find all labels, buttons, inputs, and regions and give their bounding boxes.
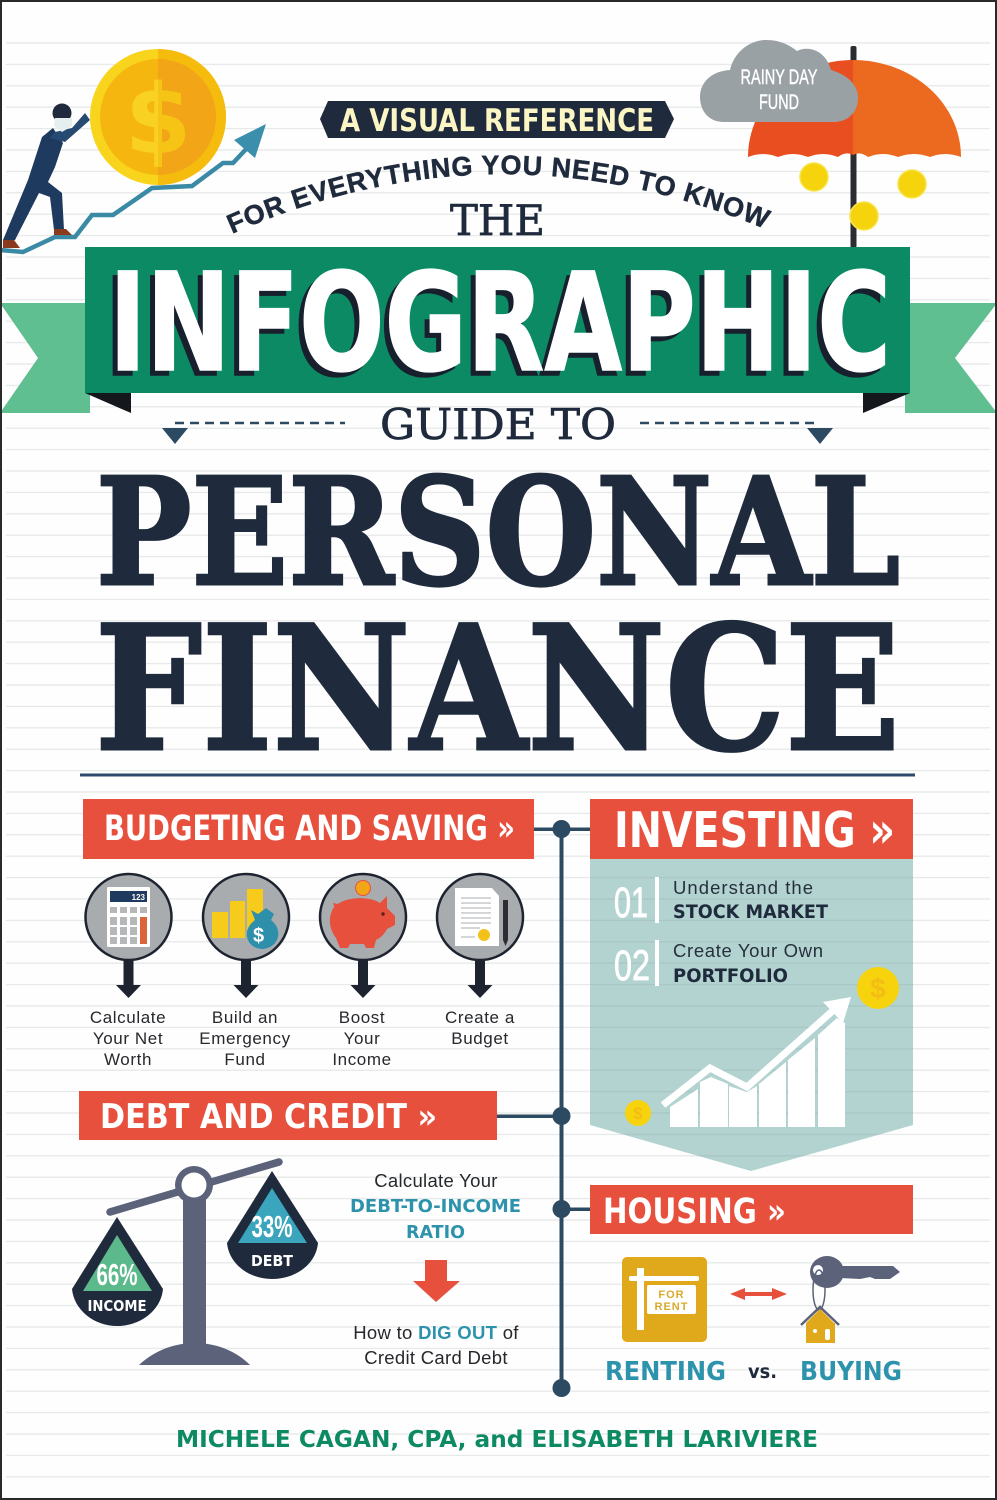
- icon: falling coins: [800, 163, 926, 230]
- icon: coin pushed uphill: [90, 49, 226, 185]
- icon: key with house fob: [801, 1256, 900, 1343]
- label: Create a: [445, 1008, 515, 1027]
- label: Calculate: [90, 1008, 166, 1027]
- label: [199, 1008, 291, 1069]
- heading: finance: FINANCE: [95, 587, 900, 790]
- icon: coin pushed uphill: $: [125, 64, 191, 176]
- label: Build an: [212, 1008, 278, 1027]
- badge: a visual reference: A VISUAL REFERENCE: [340, 103, 654, 139]
- weight: 33% debt: 33%: [252, 1209, 292, 1244]
- budgeting item: build an emergency fund: [199, 874, 291, 1069]
- icon: balance scale: [72, 1162, 318, 1365]
- icon: for rent sign: RENT: [655, 1301, 688, 1313]
- label: [332, 1008, 392, 1069]
- weight: 33% debt: DEBT: [251, 1252, 294, 1270]
- heading: guide to: GUIDE TO: [380, 400, 616, 449]
- investing step 01: [614, 877, 828, 927]
- debt to income text: Calculate Your: [374, 1170, 498, 1191]
- label: Worth: [104, 1050, 152, 1069]
- icon: calculator: [86, 874, 172, 960]
- investing step 02: PORTFOLIO: [673, 965, 788, 987]
- arrow down: [116, 960, 141, 998]
- weight: 66% income: 66%: [96, 1257, 138, 1292]
- label: [445, 1008, 515, 1048]
- label: buying: BUYING: [800, 1357, 902, 1387]
- icon: emergency fund money bag: $: [253, 925, 264, 947]
- weight: 66% income: INCOME: [88, 1297, 146, 1315]
- section header: budgeting and saving: BUDGETING AND SAVING »: [104, 809, 515, 849]
- debt to income text: DEBT-TO-INCOME: [350, 1196, 521, 1217]
- credit card debt text: [353, 1322, 519, 1368]
- investing step 02: 02: [614, 942, 650, 990]
- label: Income: [332, 1050, 392, 1069]
- weight: 66% income: [72, 1217, 163, 1326]
- dashed arrow right: [640, 423, 833, 444]
- budgeting item: calculate your net worth: [86, 874, 172, 1069]
- budgeting item: create a budget: [437, 874, 523, 1048]
- label: Your: [344, 1029, 380, 1048]
- icon: large coin: [857, 967, 899, 1009]
- arrow: double headed: [730, 1288, 787, 1300]
- label: Emergency: [199, 1029, 291, 1048]
- weight: 33% debt: [227, 1171, 318, 1279]
- investing step 01: Understand the: [673, 877, 813, 898]
- investing step 02: [614, 940, 823, 990]
- icon: rising arrow line: [0, 124, 266, 252]
- arrow down: [468, 960, 492, 998]
- chart: rising white bars with arrow: [663, 997, 851, 1127]
- section header: budgeting and saving: [83, 799, 534, 859]
- arrow down: [350, 960, 376, 998]
- section header: housing: [590, 1185, 913, 1234]
- label: Your Net: [93, 1029, 163, 1048]
- curved subtitle: FOR EVERYTHING YOU NEED TO KNOW: [226, 155, 772, 234]
- ribbon banner: [0, 247, 997, 413]
- heading: the: THE: [450, 196, 545, 245]
- icon: rainy day cloud: RAINY DAY: [740, 66, 818, 89]
- icon: coin pushed uphill: $: [125, 64, 191, 176]
- icon: rainy day cloud: [700, 40, 858, 122]
- investing step 01: 01: [614, 879, 648, 927]
- credit card debt text: How to DIG OUT of: [353, 1322, 519, 1343]
- label: Fund: [224, 1050, 266, 1069]
- icon: piggy bank: [320, 874, 406, 960]
- label: Budget: [451, 1029, 509, 1048]
- section header: debt and credit: DEBT AND CREDIT »: [100, 1097, 437, 1137]
- label: renting: RENTING: [605, 1357, 726, 1387]
- scale stand and beam: [110, 1162, 279, 1365]
- debt to income text: RATIO: [406, 1222, 465, 1243]
- arrow down: [234, 960, 258, 998]
- authors: MICHELE CAGAN, CPA, and ELISABETH LARIVIERE: [176, 1427, 818, 1453]
- label: vs.: vs.: [748, 1361, 777, 1383]
- icon: rainy day cloud: FUND: [759, 91, 799, 114]
- icon: small coin: $: [633, 1104, 643, 1123]
- budgeting item: boost your income: [320, 874, 406, 1069]
- label: Boost: [339, 1008, 385, 1027]
- section header: housing: HOUSING »: [603, 1192, 786, 1232]
- debt to income text: [350, 1170, 521, 1243]
- icon: small coin: [625, 1100, 651, 1126]
- icon: large coin: $: [870, 973, 886, 1004]
- investing step 01: STOCK MARKET: [673, 901, 828, 923]
- icon: businessman pushing coin: [3, 104, 90, 248]
- icon: for rent sign: FOR: [658, 1289, 685, 1301]
- section header: investing: INVESTING »: [614, 802, 895, 859]
- icon: calculator: 123: [132, 893, 146, 902]
- arrow: red down: [413, 1260, 460, 1302]
- icon: emergency fund money bag: [203, 874, 289, 960]
- label: [90, 1008, 166, 1069]
- investing step 02: Create Your Own: [673, 940, 823, 961]
- credit card debt text: Credit Card Debt: [364, 1347, 508, 1368]
- icon: for rent sign: [622, 1257, 707, 1342]
- icon: budget document and pen: [437, 874, 523, 960]
- connector timeline: [497, 820, 590, 1397]
- panel: investing background: [590, 859, 913, 1171]
- icon: umbrella: [748, 46, 961, 248]
- dashed arrow left: [162, 423, 345, 444]
